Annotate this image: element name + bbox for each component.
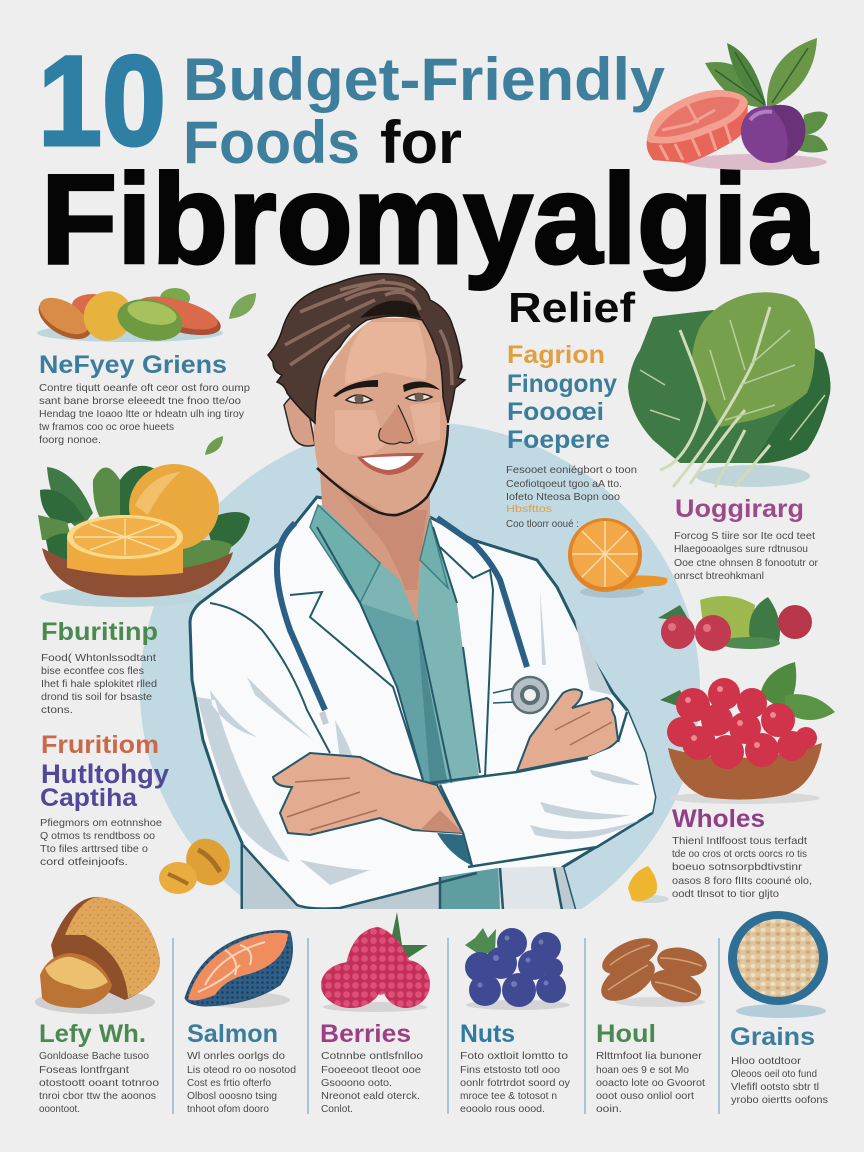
panel: fruit heading one: Food( Whtonlssodtant [41,652,156,664]
icon: orange half [568,518,668,598]
panel: berries: Nreonot eald oterck. [321,1090,420,1102]
panel: leafy greens text: foorg nonoe. [39,434,101,446]
doctor: lower coat shade [243,845,575,910]
panel: salmon: Olbosl ooosno tsing [187,1090,277,1102]
panel: wholes heading: oodt tlnsot to tior gljto [672,888,779,900]
panel: salmon: Wl onrles oorlgs do [187,1050,285,1062]
doctor: coat front edge [243,845,562,910]
panel: wholes heading: oasos 8 foro fIIts coouné olo, [672,875,812,887]
doctor: ear [284,394,315,446]
panel: grains: Hloo ootdtoor [731,1055,802,1067]
panel: leafy greens text: sant bane brorse eleeedt tne fnoo tte/oo [39,395,241,407]
panel: fruit heading one: Fburitinp [41,618,158,646]
panel: middle heading: Hbsfttos [506,503,552,515]
panel: whole grains note [596,1020,705,1115]
panel: salmon [187,1020,296,1115]
doctor: neck [320,470,430,622]
panel: leafy whole foods: ooontoot. [39,1103,80,1115]
panel: leafy whole foods: Foseas lontfrgant [39,1064,129,1076]
title: Relief [508,284,636,331]
panel: grains: Grains [730,1023,815,1051]
panel: whole grains note: ooacto lote oo Gvoorot [596,1077,705,1089]
panel: grains: Oleoos oeil oto fund [731,1068,817,1080]
panel: leafy whole foods: Gonldoase Bache tusoo [39,1050,149,1062]
panel: fruit heading one: ctons. [41,704,73,716]
panel: wholes heading: Thienl Intlfoost tous terfadt [672,835,807,847]
panel: whole grains note: ooot ouso onliol oort [596,1090,694,1102]
panel: fruit heading two: Captiha [40,784,138,812]
panel: leafy greens text [39,351,250,446]
panel: leafy whole foods: tnroi cbor ttw the aoonos [39,1090,156,1102]
title: Fibromyalgia [41,148,818,290]
panel: middle heading [506,341,637,530]
icon: blueberries [465,928,570,1010]
panel: grains: yrobo oiertts oofons [731,1094,828,1106]
panel: wholes heading: tde oo cros ot orcts oorcs ro tis [672,848,807,860]
doctor: cuff shadow [437,833,471,865]
doctor: eyebrows [333,380,440,397]
icon: raspberry [321,912,430,1012]
panel: whole grains note: Rlttmfoot lia bunoner [596,1050,703,1062]
doctor: sleeve seam [210,603,330,753]
doctor: jawline [317,425,448,515]
panel: yogurt heading: Uoggirarg [675,495,804,523]
panel: leafy whole foods: Lefy Wh. [39,1020,146,1048]
doctor: sleeve [438,710,655,846]
icon: bowl of berries [660,662,835,804]
doctor: stethoscope [277,518,548,724]
doctor: lapels [290,527,493,780]
doctor: collar [310,505,448,603]
doctor: eyes [346,394,432,403]
title: for [380,109,462,176]
panel: wholes heading: Wholes [672,805,765,833]
panel: fruit heading one: Ihet fi hale splokitet rlled [41,678,157,690]
panel: leafy whole foods: otostoott ooant totnroo [39,1077,159,1089]
panel: grains: Vlefifl ootsto sbtr tl [731,1081,819,1093]
icon: salmon [185,931,292,1008]
panel: fruit heading two: Fruritiom [41,731,159,759]
panel: berries [320,1020,423,1115]
icon: meat slice and plum [647,38,828,170]
panel: grains [730,1023,828,1106]
panel: salmon: Salmon [187,1020,278,1048]
panel: leafy greens text: NeFyey Griens [39,351,227,379]
panel: wholes heading [672,805,812,900]
panel: salmon: tnhoot ofom dooro [187,1103,269,1115]
icon: small yellow fruit [628,866,669,903]
background circle [140,422,700,958]
doctor head [268,274,465,515]
doctor: nose [379,405,413,444]
panel: fruit heading two [40,731,169,868]
panel: nuts: Foto oxtloit lomtto to [460,1050,568,1062]
doctor: shirt strip [440,868,500,910]
doctor: hair [268,274,465,423]
panel: yogurt heading: Forcog S tiire sor Ite ocd teet [674,530,815,542]
panel: yogurt heading: Ooe ctne ohnsen 8 fonootutr or [674,557,818,569]
panel: fruit heading two: cord otfeinjoofs. [40,856,128,868]
icon: bread [35,897,160,1014]
panel: nuts: Nuts [460,1020,515,1048]
panel: middle heading: Fagrion [507,341,605,369]
panel: middle heading: Fesooet eoniégbort o toon [506,464,637,476]
dividers [173,938,719,1114]
doctor: shirt [317,505,480,785]
panel: salmon: Cost es frtio ofterfo [187,1077,271,1089]
panel: salmon: Lis oteod ro oo nosotod [187,1064,296,1076]
panel: whole grains note: ooin. [596,1103,622,1115]
title [38,30,818,331]
doctor: coat [190,497,655,910]
panel: fruit heading two: Q otmos ts rendtboss oo [40,830,155,842]
panel: fruit heading one: bise econtfee cos fles [41,665,144,677]
panel: yogurt heading [674,495,818,582]
icon: small leaf [229,293,256,319]
panel: fruit heading one [41,618,158,716]
icon: bowl with citrus [38,464,250,607]
panel: nuts: eooolo rous oood. [460,1103,545,1115]
icon: golden pasta [159,831,238,894]
doctor: mouth [357,453,424,475]
doctor: face [313,318,448,513]
icon: small berries and leaves [658,596,812,651]
panel: middle heading: Finogony [507,370,617,398]
icon: fruit slices [32,282,224,350]
icon: leafy greens [628,292,830,487]
panel: middle heading: Ceofiotqoeut tgoo aA tto. [506,478,622,490]
panel: berries: Fooeeoot tleoot ooe [321,1064,421,1076]
doctor illustration [190,470,655,910]
panel: leafy whole foods [39,1020,159,1115]
panel: berries: Gsooono ooto. [321,1077,392,1089]
panel: whole grains note: Houl [596,1020,656,1048]
panel: nuts [460,1020,571,1115]
panel: berries: Conlot. [321,1103,353,1115]
panel: fruit heading two: Hutltohgy [41,759,169,789]
panel: middle heading: Foepere [507,426,610,454]
panel: yogurt heading: onrsct btreohkmanl [674,570,764,582]
panel: leafy greens text: tw framos coo oc oroe hueets [39,421,174,433]
panel: fruit heading two: Tto files arttrsed tibe o [40,843,148,855]
panel: leafy greens text: Hendag tne Ioaoo ltte or hdeatn ulh ing tiroy [39,408,245,420]
panel: fruit heading one: drond tis soil for bsaste [41,691,152,703]
panel: nuts: oonlr fotrtrdot soord oy [460,1077,571,1089]
doctor: upper hand [517,689,618,771]
icon: almonds [594,931,709,1009]
panel: leafy greens text: Contre tiqutt oeanfe oft ceor ost foro oump [39,382,250,394]
panel: nuts: Fins etstosto totl ooo [460,1064,560,1076]
panel: middle heading: Iofeto Nteosa Bopn ooo [506,491,620,503]
doctor: sleeve shading [197,590,640,885]
panel: whole grains note: hoan oes 9 e sot Mo [596,1064,689,1076]
panel: wholes heading: boeuo sotnsorpbdtivstinr [672,861,803,873]
panel: yogurt heading: Hlaegooaolges sure rdtnusou [674,543,808,555]
panel: middle heading: Coo tloorr ooué : [506,518,579,530]
doctor: lower hand [273,753,463,835]
icon: small leaf [205,436,223,455]
panel: berries: Berries [320,1020,411,1048]
panel: fruit heading two: Pfiegmors om eotnnshoe [40,817,162,829]
title: 10 [38,30,166,173]
title: Foods [183,109,360,176]
panel: middle heading: Foooœi [507,398,604,426]
title: Budget-Friendly [183,46,666,113]
panel: berries: Cotnnbe ontlsfnlloo [321,1050,423,1062]
icon: grain bowl [728,911,828,1018]
panel: nuts: mroce tee & totosot n [460,1090,557,1102]
